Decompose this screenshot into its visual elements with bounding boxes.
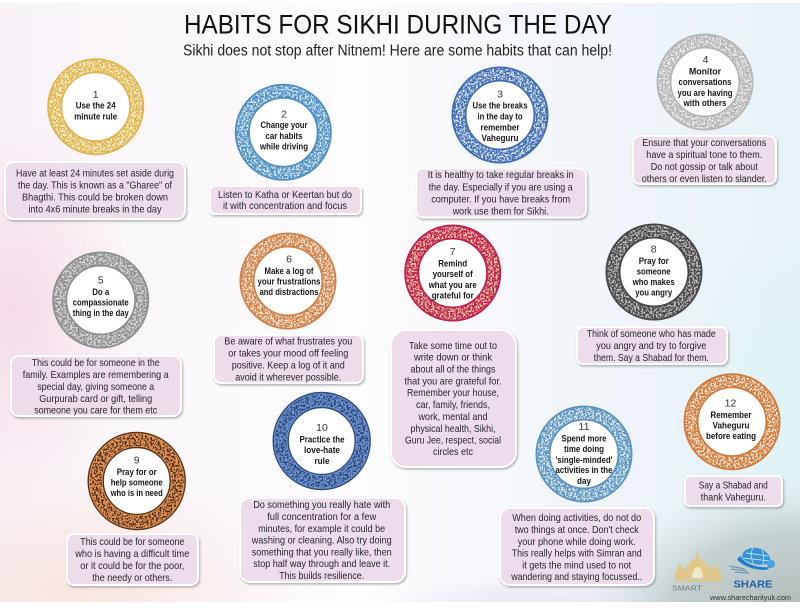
habit 11 text box: This really helps with Simran and: [512, 548, 642, 560]
habit 11 ring: [543, 413, 625, 495]
habit 2 text box: Listen to Katha or Keertan but do: [218, 190, 352, 201]
habit 7 text box: work, mental and: [418, 412, 488, 423]
habit 1 text box: [5, 162, 185, 219]
habit 4 ring: Monitor: [689, 66, 721, 78]
habit 7 text box: car, family, friends,: [416, 400, 490, 411]
habit 5 ring: 5: [98, 274, 104, 286]
habit 2 ring: [242, 91, 324, 173]
habit 3 text box: [416, 168, 586, 218]
habit 11 text box: it gets the mind used to not: [522, 560, 631, 572]
habit 4 text box: Do not gossip or talk about: [651, 162, 758, 173]
habit 9 ring: Pray for or: [117, 467, 157, 478]
habit 10 text box: This builds resilience.: [279, 571, 364, 582]
habit 8 text box: [577, 327, 727, 364]
habit 4 ring: conversations: [678, 77, 732, 88]
habit 5 text box: [11, 356, 181, 416]
habit 4 ring: you are having: [678, 88, 733, 99]
habit 7 text box: circles etc: [433, 447, 473, 458]
habit 4 text box: Ensure that your conversations: [642, 138, 766, 149]
habit 9 ring: help someone: [111, 478, 163, 488]
habit 3 ring: 3: [497, 88, 503, 100]
habit 7 text box: Guru Jee, respect, social: [405, 436, 501, 446]
habit 1 ring: minute rule: [74, 112, 117, 122]
habit 10 ring: 10: [316, 422, 328, 434]
habit 11 ring: Spend more: [562, 434, 606, 444]
habit 11 text box: [500, 508, 654, 585]
habit 9 ring: who is in need: [110, 488, 163, 499]
habit 3 text box: the day. Especially if you are using a: [429, 182, 573, 194]
website url: www.sharecharityuk.com: [709, 595, 791, 602]
habit 12 ring: 12: [725, 398, 736, 410]
habit 4 text box: [633, 136, 776, 185]
habit 1 ring: [55, 66, 137, 148]
habit 6 ring: Make a log of: [264, 266, 314, 277]
habit 7 ring: [412, 232, 494, 314]
habit 11 ring: activities in the: [556, 465, 612, 476]
habit 7 text box: physical health, Sikhi,: [410, 424, 496, 435]
habit 3 ring: in the day to: [478, 112, 523, 122]
habit 6 ring: your frustrations: [258, 276, 320, 288]
habit 6 text box: positive. Keep a log of it and: [232, 360, 345, 372]
habit 10 text box: washing or cleaning. Also try doing: [251, 536, 392, 546]
habit 9 ring: 9: [134, 454, 140, 466]
habit 12 text box: [685, 476, 782, 506]
habit 8 ring: 8: [651, 244, 657, 256]
habit 7 ring: what you are: [428, 280, 477, 291]
habit 10 text box: [240, 498, 405, 582]
habit 5 ring: Do a: [92, 287, 110, 298]
habit 2 ring: car habits: [266, 131, 302, 142]
habit 8 ring: [613, 231, 695, 313]
habit 8 ring: you angry: [635, 288, 673, 298]
habit 5 ring: thing in the day: [73, 308, 129, 319]
habit 6 text box: or takes your mood off feeling: [228, 348, 349, 360]
habit 7 ring: grateful for: [432, 290, 474, 302]
habit 4 text box: others or even listen to slander.: [642, 174, 767, 185]
habit 1 text box: the day. This is known as a "Gharee" of: [18, 180, 172, 192]
habit 10 text box: Do something you really hate with: [253, 500, 390, 511]
habit 11 ring: 11: [579, 421, 590, 433]
habit 11 text box: When doing activities, do not do: [512, 513, 641, 524]
habit 3 ring: remember: [480, 122, 520, 134]
habit 7 text box: that you are grateful for.: [404, 376, 502, 388]
habit 3 ring: Vaheguru: [482, 133, 519, 144]
habit 9 text box: This could be for someone: [80, 537, 185, 548]
habit 10 ring: love-hate: [304, 445, 340, 456]
habit 1 ring: 1: [93, 89, 99, 101]
habit 10 text box: minutes, for example it could be: [258, 524, 385, 535]
habit 2 ring: 2: [281, 108, 287, 120]
habit 10 ring: [273, 392, 370, 490]
habit 7 text box: write down or think: [413, 352, 493, 364]
logo: Smart Sikhi: SMART: [672, 586, 703, 592]
habit 9 text box: or it could be for the poor,: [80, 561, 184, 572]
habit 8 text box: them. Say a Shabad for them.: [594, 353, 709, 364]
habit 2 text box: [210, 186, 361, 214]
title: HABITS FOR SIKHI DURING THE DAY: [184, 10, 612, 40]
habit 12 ring: before eating: [706, 431, 756, 442]
habit 7 text box: Take some time out to: [409, 341, 497, 352]
logo: Share: [729, 548, 775, 590]
habit 10 ring: Practice the: [300, 434, 344, 446]
habit 5 text box: someone you care for them etc: [34, 406, 157, 416]
habit 10 text box: full concentration for a few: [267, 512, 377, 523]
logo: Smart Sikhi: SIKHI: [702, 586, 720, 592]
habit 5 ring: [60, 259, 142, 341]
habit 8 ring: someone: [637, 266, 671, 278]
habit 10 text box: something that you really like, then: [252, 548, 392, 558]
subtitle: Sikhi does not stop after Nitnem! Here are some habits that can help!: [183, 42, 612, 60]
habit 3 text box: computer. If you have breaks from: [431, 194, 570, 206]
habit 7 text box: Remember your house,: [407, 388, 499, 399]
habit 7 ring: Remind: [438, 258, 467, 270]
habit 6 ring: and distractions: [260, 287, 318, 298]
habit 5 text box: family. Examples are remembering a: [23, 370, 169, 381]
habit 7 text box: [391, 330, 516, 467]
habit 9 text box: the needy or others.: [92, 573, 172, 584]
habit 6 text box: Be aware of what frustrates you: [224, 336, 352, 348]
habit 9 text box: who is having a difficult time: [74, 549, 190, 560]
habit 5 text box: This could be for someone in the: [32, 358, 160, 369]
habit 11 ring: day: [577, 476, 592, 487]
habit 4 ring: [664, 41, 746, 123]
habit 12 ring: Vaheguru: [712, 420, 750, 432]
habit 5 ring: compassionate: [73, 298, 129, 308]
habit 11 text box: your phone while doing work.: [518, 537, 636, 548]
logo: Share: SHARE: [734, 578, 772, 590]
habit 2 ring: Change your: [260, 120, 308, 131]
habit 12 ring: Remember: [710, 410, 752, 421]
habit 6 ring: [247, 240, 329, 322]
habit 4 ring: 4: [703, 54, 709, 66]
habit 3 text box: work use them for Sikhi.: [452, 206, 549, 218]
habit 12 text box: thank Vaheguru.: [701, 492, 766, 504]
habit 12 text box: Say a Shabad and: [699, 480, 768, 492]
habit 6 ring: 6: [286, 254, 292, 266]
habit 11 ring: 'single-minded': [556, 455, 612, 466]
habit 4 ring: with others: [683, 98, 726, 109]
habit 2 ring: while driving: [259, 142, 308, 153]
habit 7 ring: yourself of: [433, 269, 473, 280]
habit 4 text box: have a spiritual tone to them.: [646, 150, 762, 161]
habit 10 text box: stop half way through and leave it.: [253, 559, 390, 570]
habit 6 text box: avoid it wherever possible.: [235, 372, 341, 384]
habit 9 ring: [88, 432, 185, 530]
habit 2 text box: it with concentration and focus: [223, 201, 347, 212]
habit 12 ring: [691, 381, 773, 463]
habit 3 ring: [459, 74, 541, 156]
habit 11 text box: two things at once. Don't check: [515, 525, 639, 536]
habit 8 ring: Pray for: [639, 256, 669, 267]
habit 3 text box: It is healthy to take regular breaks in: [428, 170, 574, 181]
logo: Smart Sikhi: [672, 547, 721, 592]
habit 11 ring: time doing: [564, 444, 604, 455]
habit 1 text box: Have at least 24 minutes set aside durig: [16, 168, 174, 180]
habit 8 ring: who makes: [632, 277, 675, 288]
habit 10 ring: rule: [314, 456, 330, 467]
habit 11 text box: wandering and staying focussed..: [510, 572, 642, 583]
habit 7 text box: about all of the things: [410, 364, 496, 376]
habit 3 ring: Use the breaks: [472, 100, 528, 112]
habit 1 text box: Bhagthi. This could be broken down: [22, 192, 168, 204]
habit 1 ring: Use the 24: [76, 100, 116, 112]
habit 7 ring: 7: [450, 246, 456, 258]
habit 5 text box: Gurpurab card or gift, telling: [39, 394, 152, 405]
habit 5 text box: special day, giving someone a: [37, 382, 154, 393]
habit 8 text box: you angry and try to forgive: [596, 341, 707, 352]
habit 1 text box: into 4x6 minute breaks in the day: [28, 204, 162, 216]
habit 9 text box: [67, 534, 198, 585]
habit 8 text box: Think of someone who has made: [587, 329, 716, 340]
habit 6 text box: [214, 335, 363, 384]
